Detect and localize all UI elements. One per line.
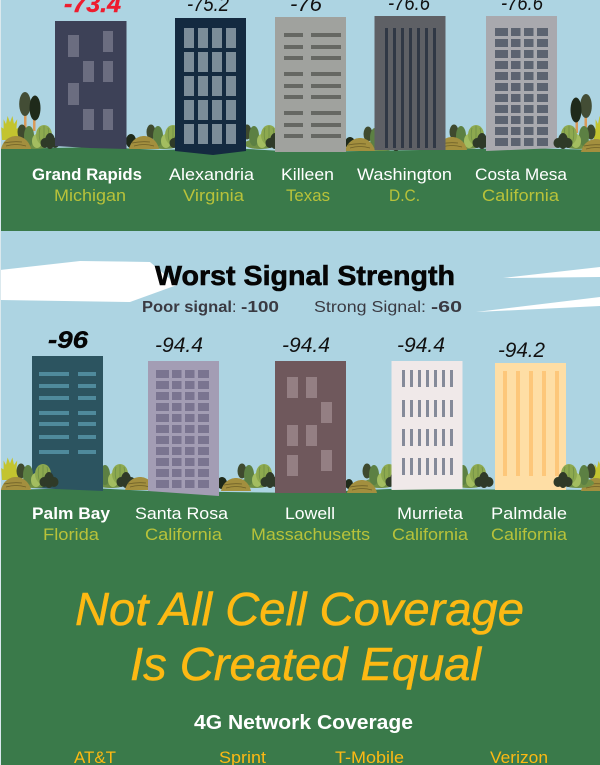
clouds <box>0 261 600 312</box>
scale note: -60 <box>431 299 462 316</box>
building: Santa Rosa <box>148 361 219 496</box>
background shrubs <box>1 458 600 493</box>
heading: Worst Signal Strength <box>155 260 455 291</box>
city and state labels: Palmdale <box>491 504 567 523</box>
signal values: -94.2 <box>498 339 545 362</box>
city and state labels <box>32 504 568 544</box>
city and state labels: Michigan <box>54 186 126 205</box>
left edge strip <box>0 0 1 765</box>
carrier labels <box>74 748 548 765</box>
section title: Is Created Equal <box>130 638 483 690</box>
city and state labels: Washington <box>357 165 452 184</box>
ground <box>0 488 600 765</box>
city and state labels: Lowell <box>285 504 335 523</box>
building: Murrieta <box>392 361 462 490</box>
scale note <box>142 299 462 316</box>
city and state labels: Santa Rosa <box>135 504 229 523</box>
panel: best signal cities (continued) <box>0 0 600 231</box>
city and state labels: California <box>482 186 560 205</box>
city and state labels: Killeen <box>281 165 334 184</box>
city and state labels: California <box>491 525 568 544</box>
city and state labels: Texas <box>286 186 330 205</box>
city and state labels: Murrieta <box>397 504 464 523</box>
scale note: -100 <box>241 299 279 316</box>
section title <box>75 583 524 690</box>
panel: worst signal strength <box>0 260 600 765</box>
city and state labels: Massachusetts <box>251 525 370 544</box>
building: Alexandria <box>175 18 246 155</box>
building: Palm Bay <box>32 356 103 491</box>
cloud-free ground band <box>0 147 600 231</box>
signal values: -94.4 <box>397 334 445 357</box>
city and state labels: Virginia <box>183 186 245 205</box>
building: Costa Mesa <box>486 16 557 151</box>
signal values: -96 <box>48 327 89 354</box>
foreground shrubs <box>1 464 596 490</box>
city and state labels: Florida <box>43 525 100 544</box>
shrubs between buildings <box>126 124 492 151</box>
building: Washington <box>374 16 446 150</box>
signal values <box>64 0 543 18</box>
city and state labels: California <box>145 525 223 544</box>
building: Killeen <box>275 17 346 152</box>
city and state labels: Palm Bay <box>32 504 111 523</box>
building: Palmdale <box>495 363 566 490</box>
city and state labels: California <box>392 525 469 544</box>
subheading: 4G network coverage: 4G Network Coverage <box>194 712 413 734</box>
signal values <box>48 327 545 362</box>
city and state labels: Alexandria <box>169 165 255 184</box>
right trees and shrubs <box>554 94 600 152</box>
scale note: Poor signal <box>142 299 232 316</box>
signal values: -94.4 <box>282 334 330 357</box>
scale note: Strong Signal: <box>314 299 426 316</box>
building: Grand Rapids <box>55 21 126 149</box>
city and state labels: Grand Rapids <box>32 165 142 184</box>
building: Lowell <box>275 361 346 493</box>
city and state labels <box>32 165 568 205</box>
city and state labels: Costa Mesa <box>475 165 568 184</box>
left trees and shrubs <box>1 92 60 149</box>
city and state labels: D.C. <box>389 186 420 205</box>
section title: Not All Cell Coverage <box>75 583 524 635</box>
signal values: -94.4 <box>155 334 203 357</box>
scale note: : <box>232 299 236 316</box>
